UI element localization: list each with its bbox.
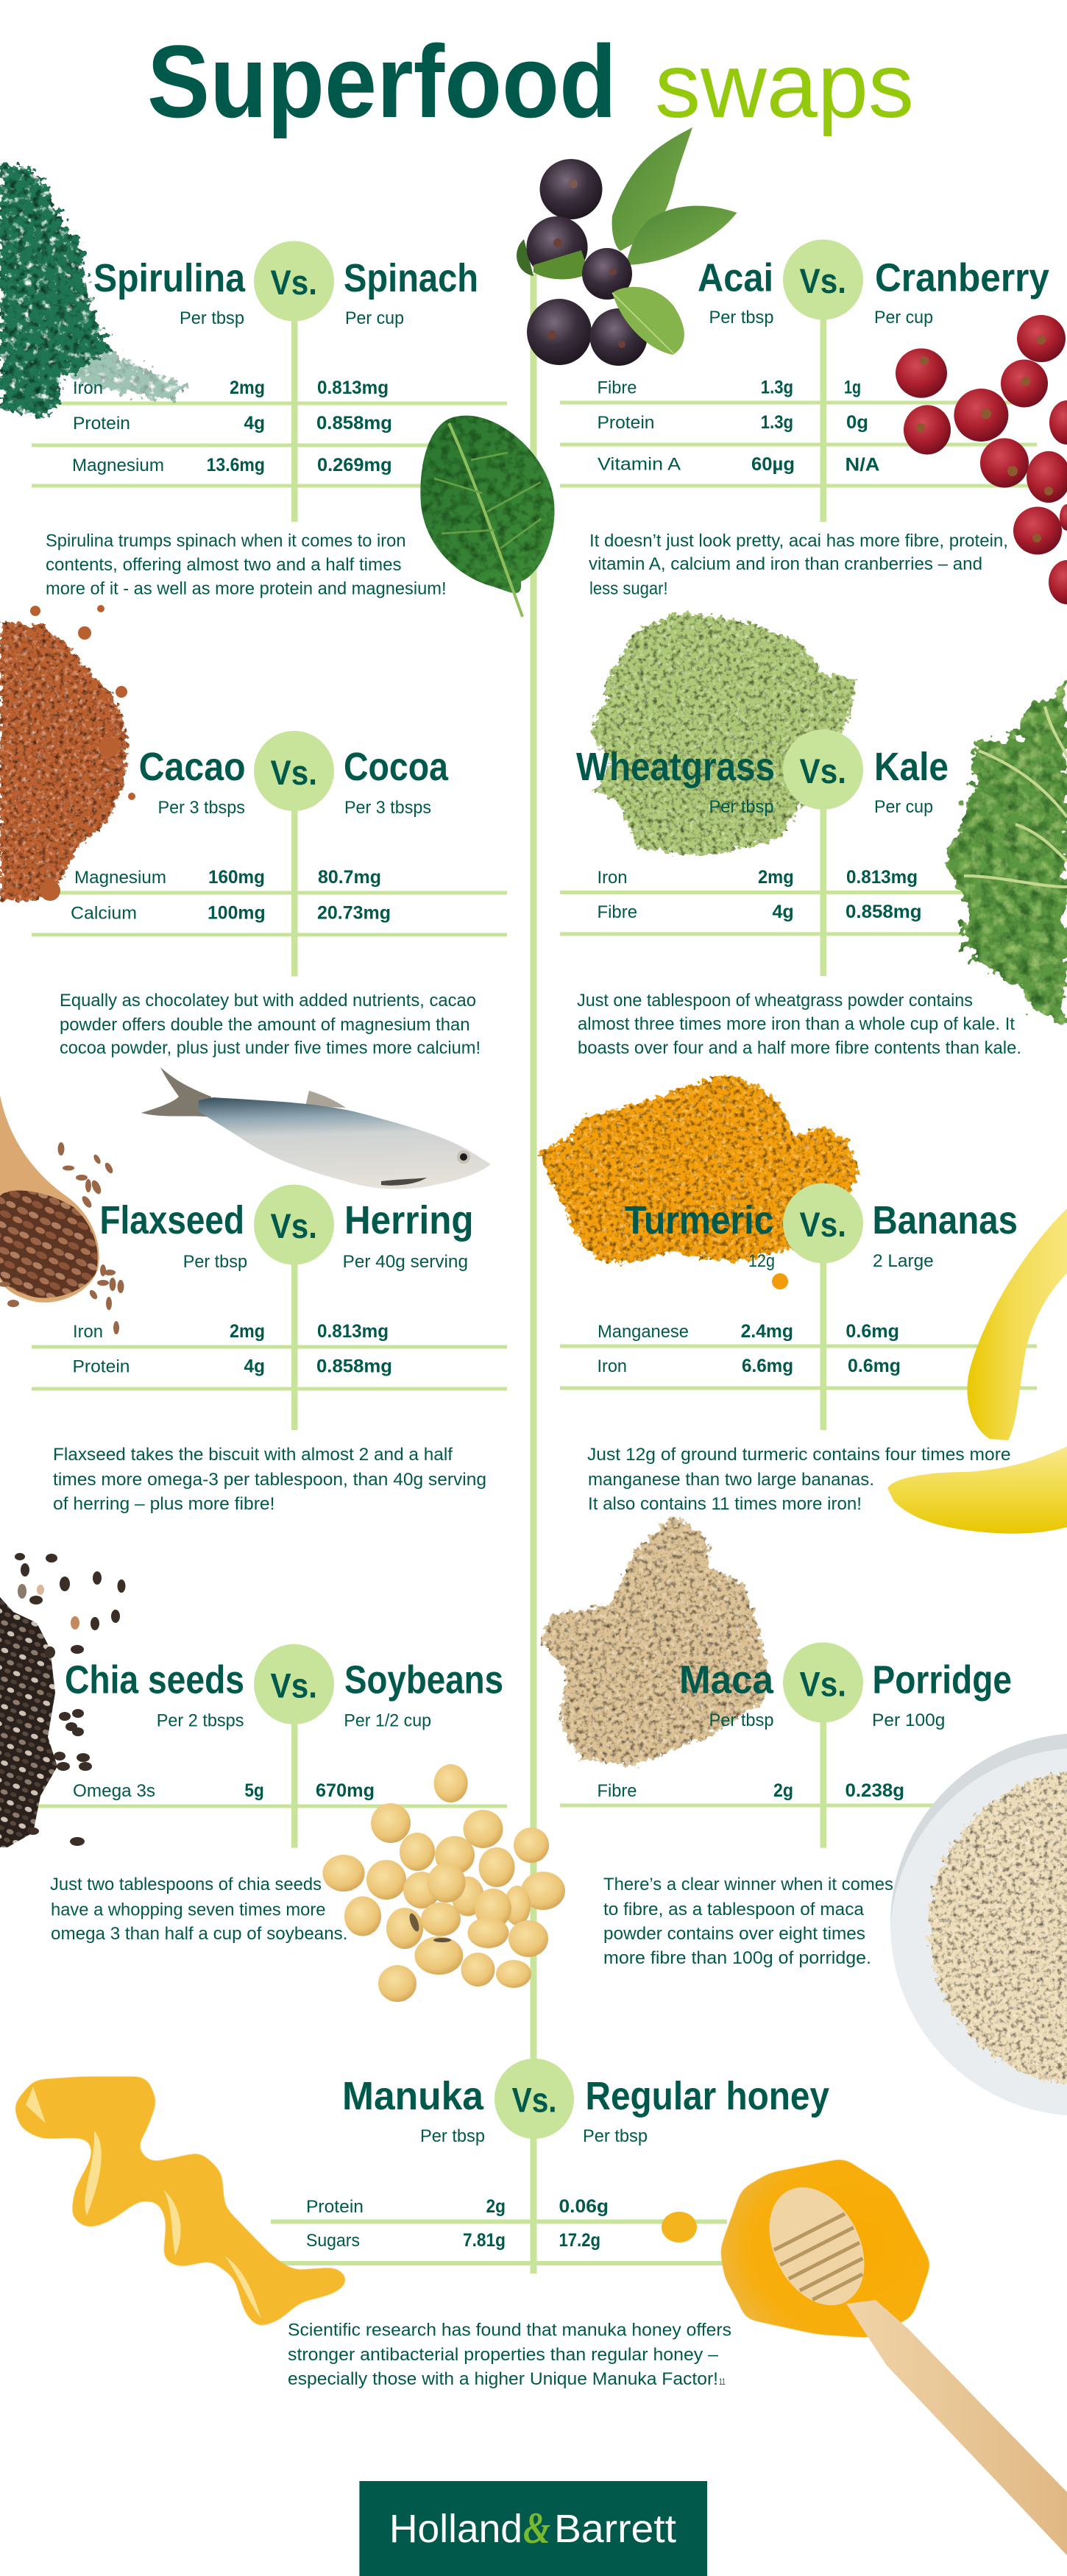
nutrient table: Iron	[598, 868, 627, 888]
vs badge	[254, 731, 334, 811]
image: kale	[945, 680, 1067, 1023]
panel: acai vs cranberry	[517, 127, 1067, 604]
description: especially those with a higher Unique Manuka Factor!	[288, 2369, 718, 2389]
description: boasts over four and a half more fibre contents than kale.	[578, 1038, 1021, 1058]
description: more fibre than 100g of porridge.	[603, 1948, 871, 1968]
description: almost three times more iron than a whole cup of kale. It	[578, 1014, 1015, 1034]
table rows lines	[32, 1719, 507, 1848]
image: bananas	[887, 1209, 1067, 1534]
description: Just 12g of ground turmeric contains four times more	[587, 1445, 1011, 1465]
vs badge	[494, 2059, 574, 2139]
serving labels: Per tbsp	[709, 797, 774, 817]
serving labels: Per tbsp	[709, 308, 774, 328]
description	[53, 1445, 486, 1514]
panel: cacao vs cocoa	[0, 605, 507, 1058]
description: have a whopping seven times more	[51, 1900, 325, 1920]
nutrient table: N/A	[845, 455, 880, 475]
vs badge: Vs.	[799, 751, 846, 790]
description: It also contains 11 times more iron!	[588, 1494, 862, 1514]
serving labels	[157, 798, 431, 818]
panel: wheatgrass vs kale	[560, 612, 1067, 1058]
nutrient table: 13.6mg	[207, 455, 265, 475]
heading: turmeric: Turmeric	[625, 1198, 773, 1242]
description: Just two tablespoons of chia seeds	[50, 1875, 322, 1894]
nutrient table: Vitamin A	[598, 455, 681, 474]
description: Flaxseed takes the biscuit with almost 2 and a half	[53, 1445, 453, 1465]
image: wheatgrass powder	[589, 612, 857, 856]
nutrient table: 0.858mg	[846, 902, 921, 922]
nutrient table: Protein	[72, 1357, 130, 1377]
nutrient table: 0.06g	[559, 2196, 609, 2217]
description: It doesn’t just look pretty, acai has more fibre, protein,	[589, 531, 1008, 551]
nutrient table: 2mg	[230, 378, 265, 398]
nutrient table: 17.2g	[559, 2230, 600, 2251]
table rows lines	[560, 806, 1037, 976]
nutrient table: 2g	[486, 2196, 506, 2217]
description	[589, 531, 1008, 599]
image: honey puddle and dipper	[720, 2159, 1067, 2555]
image: honey droplet	[662, 2212, 697, 2243]
nutrient table: 1.3g	[761, 377, 793, 397]
logo: Holland & Barrett	[359, 2481, 707, 2576]
image: spirulina powder	[0, 166, 187, 419]
vs badge	[783, 1183, 863, 1263]
description	[577, 991, 1021, 1058]
description: Equally as chocolatey but with added nutrients, cacao	[60, 991, 476, 1011]
description	[60, 991, 481, 1058]
nutrient table	[598, 1321, 901, 1376]
serving labels: Per tbsp	[420, 2126, 485, 2146]
main vertical timeline	[530, 274, 537, 2274]
heading: bananas: Bananas	[873, 1198, 1018, 1242]
vs badge	[783, 240, 863, 319]
heading: soybeans: Soybeans	[344, 1657, 503, 1702]
image: acai berries and leaves	[517, 127, 737, 366]
description	[46, 531, 447, 599]
serving labels	[180, 308, 404, 328]
nutrient table: 4g	[244, 1356, 265, 1377]
nutrient table: 60µg	[751, 454, 795, 475]
serving labels	[748, 1251, 934, 1271]
panel: flaxseed vs herring	[0, 1067, 507, 1514]
table rows lines	[32, 806, 507, 976]
description: Spirulina trumps spinach when it comes to iron	[46, 531, 406, 551]
description: powder offers double the amount of magnesium than	[60, 1015, 469, 1035]
logo: Holland & Barrett: Holland	[389, 2507, 522, 2551]
nutrient table: Protein	[306, 2197, 364, 2217]
logo: Holland & Barrett: &	[523, 2504, 550, 2552]
serving labels: Per cup	[345, 308, 404, 328]
nutrient table: 0.6mg	[848, 1356, 901, 1376]
nutrient table: 0.269mg	[317, 455, 392, 475]
description: vitamin A, calcium and iron than cranberries – and	[589, 554, 982, 574]
heading: herring: Herring	[344, 1198, 474, 1242]
nutrient table: 0.6mg	[846, 1321, 899, 1342]
nutrient table	[598, 867, 921, 922]
serving labels: Per 3 tbsps	[157, 798, 245, 818]
description: manganese than two large bananas.	[588, 1470, 874, 1490]
description: times more omega-3 per tablespoon, than 40g serving	[53, 1470, 486, 1490]
serving labels: Per cup	[874, 797, 933, 817]
nutrient table: Fibre	[598, 1781, 637, 1801]
description: powder contains over eight times	[603, 1924, 865, 1944]
nutrient table: 0.813mg	[317, 378, 389, 398]
heading: spirulina: Spirulina	[93, 256, 246, 300]
description	[288, 2320, 731, 2389]
image: flaxseed spoon	[0, 1095, 124, 1334]
serving labels: Per 3 tbsps	[344, 798, 431, 818]
serving labels: Per tbsp	[709, 1710, 774, 1730]
image: maca powder	[541, 1516, 769, 1766]
nutrient table: 6.6mg	[742, 1356, 793, 1376]
heading: chia seeds: Chia seeds	[65, 1657, 244, 1702]
serving labels: Per tbsp	[183, 1252, 247, 1272]
serving labels: Per 2 tbsps	[157, 1711, 244, 1731]
description	[50, 1875, 348, 1944]
description: less sugar!	[589, 579, 668, 599]
image: turmeric powder	[539, 1075, 859, 1289]
vs badge: Vs.	[271, 1666, 317, 1705]
nutrient table: Iron	[73, 1322, 103, 1342]
vs badge: Vs.	[799, 261, 846, 300]
vs badge: Vs.	[799, 1205, 846, 1244]
vs badge: Vs.	[271, 263, 317, 302]
nutrient table: Magnesium	[72, 456, 164, 475]
serving labels: Per 1/2 cup	[344, 1711, 431, 1731]
description: stronger antibacterial properties than regular honey –	[288, 2345, 719, 2365]
nutrient table: 0.858mg	[316, 413, 392, 434]
nutrient table: 0.238g	[845, 1780, 904, 1801]
nutrient table: Manganese	[598, 1322, 689, 1342]
title: swaps	[655, 35, 914, 137]
nutrient table: 80.7mg	[318, 867, 381, 888]
nutrient table	[72, 1321, 392, 1377]
nutrient table: 0.858mg	[316, 1356, 392, 1377]
nutrient table: 20.73mg	[317, 902, 391, 923]
nutrient table: 0.813mg	[317, 1321, 389, 1342]
nutrient table: Protein	[73, 414, 130, 434]
heading: wheatgrass: Wheatgrass	[576, 745, 775, 789]
nutrient table: 1g	[844, 377, 861, 397]
nutrient table: 7.81g	[463, 2230, 506, 2251]
table rows lines	[560, 315, 1037, 522]
nutrient table: 0g	[846, 412, 868, 433]
table rows lines	[560, 1718, 950, 1848]
heading: cocoa: Cocoa	[344, 745, 449, 789]
serving labels: Per cup	[874, 308, 933, 328]
heading: kale: Kale	[874, 745, 949, 789]
image: chia seeds	[0, 1553, 125, 1847]
table rows lines	[32, 316, 507, 522]
description: 11	[719, 2377, 726, 2387]
nutrient table	[306, 2196, 609, 2251]
nutrient table: 1.3g	[761, 412, 793, 433]
image: spinach leaf	[420, 416, 555, 617]
serving labels	[709, 308, 933, 328]
nutrient table: Magnesium	[74, 868, 166, 888]
heading: cacao: Cacao	[139, 745, 246, 789]
nutrient table	[73, 1780, 375, 1801]
description: of herring – plus more fibre!	[53, 1494, 275, 1514]
description: to fibre, as a tablespoon of maca	[603, 1900, 865, 1919]
nutrient table: Iron	[73, 378, 103, 398]
description: cocoa powder, plus just under five times more calcium!	[60, 1038, 481, 1058]
serving labels: 2 Large	[873, 1251, 934, 1271]
description: contents, offering almost two and a half times	[46, 555, 402, 575]
image: cranberries	[896, 315, 1067, 604]
serving labels	[183, 1252, 468, 1272]
panel: chia seeds vs soybeans	[0, 1553, 565, 2002]
title: Superfood	[147, 24, 617, 139]
serving labels: Per 40g serving	[343, 1252, 468, 1272]
heading: porridge: Porridge	[873, 1657, 1012, 1702]
nutrient table: Protein	[598, 413, 655, 433]
title	[147, 24, 914, 139]
serving labels: Per tbsp	[180, 308, 244, 328]
serving labels: Per tbsp	[583, 2126, 648, 2146]
nutrient table: 4g	[773, 902, 794, 922]
table rows lines	[271, 2220, 727, 2265]
description	[603, 1875, 893, 1968]
description: There’s a clear winner when it comes	[603, 1875, 893, 1894]
panel: turmeric vs bananas	[539, 1075, 1067, 1534]
heading: acai: Acai	[698, 256, 773, 300]
image: soybeans	[322, 1764, 565, 2002]
logo: Holland & Barrett: Barrett	[554, 2507, 676, 2551]
heading: regular honey: Regular honey	[586, 2074, 829, 2118]
nutrient table	[71, 867, 391, 923]
nutrient table: Fibre	[598, 902, 637, 922]
nutrient table: 2.4mg	[741, 1321, 793, 1342]
heading: maca: Maca	[679, 1657, 774, 1702]
vs badge: Vs.	[271, 753, 317, 792]
image: porridge bowl	[890, 1733, 1067, 2116]
panel: spirulina vs spinach	[0, 166, 555, 617]
serving labels: Per 100g	[872, 1710, 945, 1730]
description: Just one tablespoon of wheatgrass powder contains	[577, 991, 973, 1011]
description	[587, 1445, 1011, 1514]
description: Scientific research has found that manuka honey offers	[288, 2320, 731, 2340]
vs badge: Vs.	[799, 1665, 846, 1703]
nutrient table: 5g	[244, 1780, 264, 1801]
nutrient table: 2g	[773, 1780, 793, 1801]
heading: spinach: Spinach	[344, 256, 478, 300]
description: omega 3 than half a cup of soybeans.	[51, 1924, 348, 1944]
serving labels	[420, 2126, 648, 2146]
vs badge: Vs.	[271, 1206, 317, 1245]
panel: maca vs porridge	[541, 1516, 1067, 2116]
image: herring fish	[141, 1067, 491, 1189]
vs badge	[254, 1644, 334, 1724]
table rows lines	[560, 1259, 1037, 1430]
nutrient table: 2mg	[758, 867, 794, 888]
description: more of it - as well as more protein and magnesium!	[46, 579, 447, 599]
serving labels	[709, 797, 933, 817]
nutrient table: Sugars	[306, 2231, 360, 2251]
serving labels: 12g	[748, 1251, 775, 1271]
panel: manuka vs regular honey	[13, 2059, 1067, 2555]
nutrient table	[598, 1780, 904, 1801]
heading: cranberry: Cranberry	[875, 256, 1049, 300]
vs badge	[254, 241, 334, 321]
serving labels	[709, 1710, 945, 1730]
vs badge	[783, 729, 863, 810]
nutrient table: Fibre	[598, 378, 637, 397]
nutrient table: 2mg	[230, 1321, 265, 1342]
nutrient table	[72, 378, 392, 475]
heading: manuka: Manuka	[342, 2074, 484, 2118]
nutrient table: 100mg	[208, 902, 266, 923]
nutrient table: Calcium	[71, 904, 137, 923]
heading: flaxseed: Flaxseed	[100, 1198, 244, 1242]
nutrient table: 4g	[244, 413, 265, 434]
nutrient table	[598, 377, 880, 475]
vs badge	[254, 1185, 334, 1264]
vs badge	[783, 1643, 863, 1722]
table rows lines	[32, 1260, 507, 1430]
nutrient table: Omega 3s	[73, 1781, 155, 1801]
nutrient table: 0.813mg	[846, 867, 918, 888]
nutrient table: 160mg	[208, 867, 265, 888]
image: honey drip	[13, 2077, 350, 2327]
serving labels	[157, 1711, 431, 1731]
nutrient table: 670mg	[316, 1780, 375, 1801]
vs badge: Vs.	[512, 2081, 557, 2120]
nutrient table: Iron	[598, 1356, 627, 1376]
image: cacao powder	[0, 605, 135, 902]
